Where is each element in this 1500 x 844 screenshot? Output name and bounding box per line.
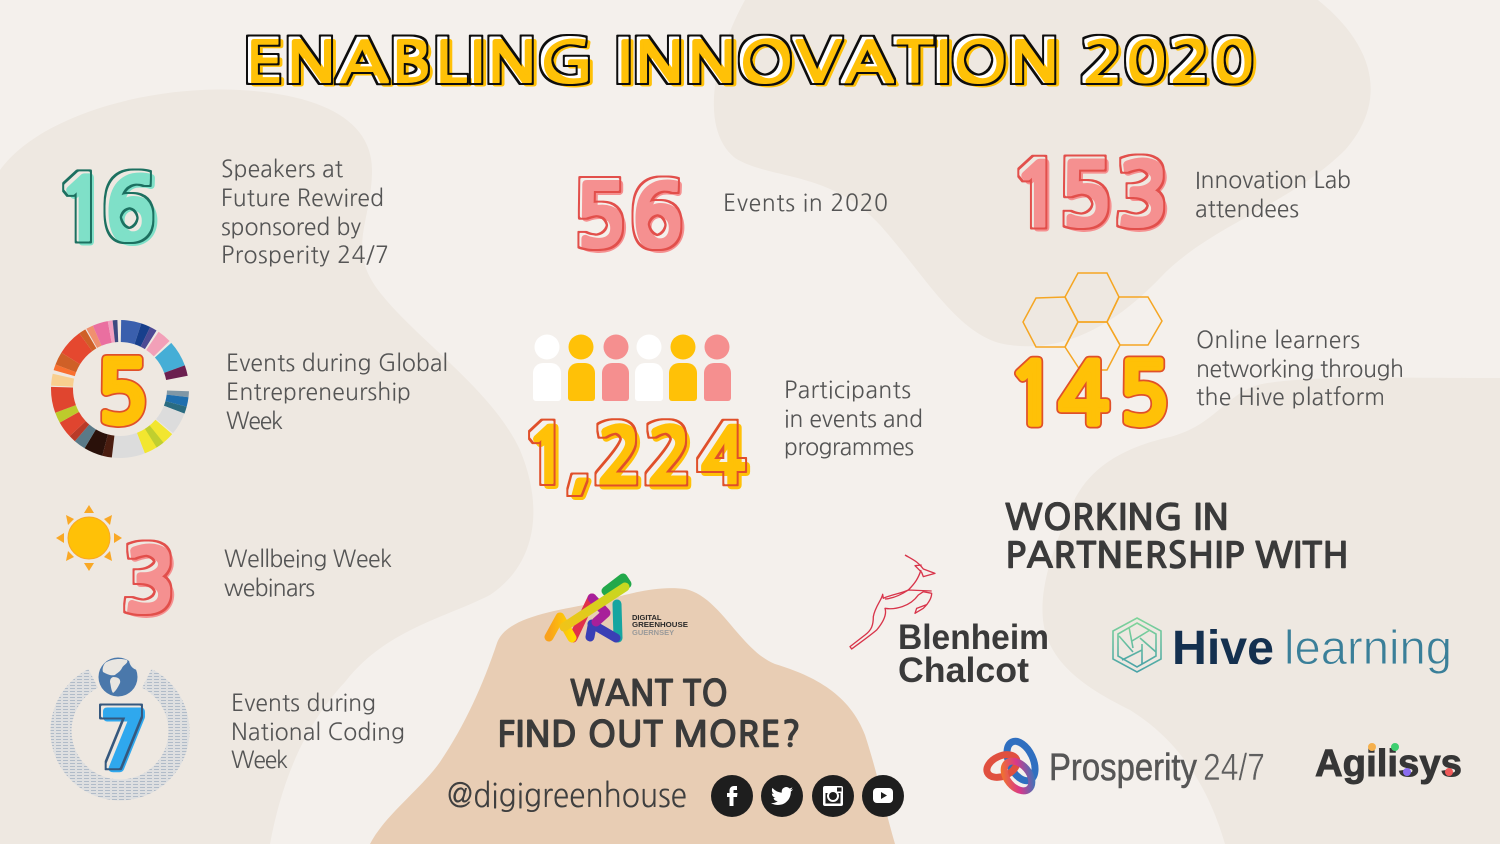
text: wellbeing week webinars: webinars	[224, 577, 315, 600]
number 5: 5	[96, 351, 148, 436]
text: national coding week: Week	[231, 749, 288, 772]
stat: 1,224 participants	[522, 334, 923, 498]
number 7: 7	[98, 702, 145, 778]
text: national coding week: National Coding	[231, 721, 405, 744]
number 145: 145	[1007, 353, 1170, 437]
title: ENABLING INNOVATION 2020	[242, 32, 1254, 91]
text: wellbeing week webinars: Wellbeing Week	[224, 548, 392, 571]
stat: 7 events	[61, 658, 405, 790]
number 56: 56	[573, 173, 683, 259]
text: participants	[784, 379, 923, 459]
text: online learners	[1196, 329, 1404, 409]
stat: 145 online learners	[1007, 273, 1404, 437]
number 56: 56	[576, 176, 686, 262]
logo text: DIGITAL	[632, 613, 662, 622]
number 153: 153	[1010, 152, 1168, 239]
logo text	[898, 618, 1049, 690]
icon: six people	[533, 334, 731, 401]
icon: colour ring	[62, 331, 178, 447]
icon: youtube	[862, 775, 904, 817]
heading: want to find out more	[497, 677, 801, 753]
stat: 3 webinars	[56, 505, 392, 628]
icon: hexagons	[1023, 273, 1162, 370]
text: innovation lab	[1195, 169, 1351, 221]
stat: 16 speakers	[55, 158, 389, 267]
logo text	[632, 613, 688, 637]
icon: instagram	[812, 775, 854, 817]
text: global entrepreneurship week: Entrepreneurship	[226, 381, 411, 404]
logo mark	[549, 578, 627, 638]
heading: want to find out more: FIND OUT MORE?	[497, 718, 801, 753]
heading: want to find out more: WANT TO	[570, 677, 728, 712]
text: online learners: Online learners	[1196, 329, 1360, 352]
stat: 5 events	[62, 331, 448, 447]
text: wellbeing week webinars	[224, 548, 392, 600]
number 153: 153	[1013, 155, 1171, 242]
text: social handle: @digigreenhouse	[447, 779, 687, 812]
text: global entrepreneurship week: Week	[226, 410, 283, 433]
number 5: 5	[96, 351, 148, 436]
logo text: 24/7	[1203, 747, 1265, 789]
title: ENABLING INNOVATION 2020	[246, 35, 1258, 94]
logo text: GUERNSEY	[632, 628, 674, 637]
logo: agilisys: Agilisys	[1315, 743, 1462, 785]
icon: twitter	[761, 775, 803, 817]
stat: 153 attendees	[1010, 152, 1351, 242]
text: participants: programmes	[784, 436, 914, 459]
stat: 56 events	[573, 173, 888, 262]
heading: working in partnership with: PARTNERSHIP WITH	[1005, 539, 1349, 574]
text: innovation lab: Innovation Lab	[1195, 169, 1351, 192]
text: events in 2020: Events in 2020	[723, 192, 888, 215]
tan call-to-action blob	[370, 588, 895, 844]
text: national coding week: Events during	[231, 692, 376, 715]
text: speakers: Speakers at	[221, 158, 344, 181]
logo text: Hive	[1172, 622, 1274, 675]
text: online learners: networking through	[1196, 358, 1404, 381]
text: participants: Participants	[784, 379, 911, 402]
icon: hive hexagon	[1113, 618, 1161, 672]
text: speakers: sponsored by	[221, 216, 361, 239]
number 16: 16	[58, 169, 159, 255]
logo text: Prosperity	[1049, 747, 1197, 789]
icon: antelope	[850, 555, 935, 649]
number 1,224: 1,224	[522, 416, 745, 494]
text: global entrepreneurship week: Events during Global	[226, 352, 448, 375]
logo: digital greenhouse	[549, 578, 688, 638]
logo: blenheim chalcot	[850, 555, 1049, 690]
icon: facebook	[711, 775, 753, 817]
title: ENABLING INNOVATION 2020	[242, 32, 1254, 91]
number 3: 3	[125, 541, 178, 628]
logo: prosperity 24/7	[983, 737, 1265, 796]
icon: globe	[98, 658, 138, 696]
number 3: 3	[122, 538, 175, 625]
number 1,224: 1,224	[526, 420, 749, 498]
heading: working in partnership with: WORKING IN	[1005, 501, 1229, 536]
text: online learners: the Hive platform	[1196, 386, 1385, 409]
logo text	[1172, 622, 1452, 675]
text: speakers	[221, 158, 389, 267]
text: participants: in events and	[784, 408, 923, 431]
icon: sun	[56, 505, 122, 571]
logo text: GREENHOUSE	[632, 620, 688, 629]
number 7: 7	[101, 705, 148, 781]
text: global entrepreneurship week	[226, 352, 448, 433]
logo: hive learning	[1113, 618, 1452, 675]
icon: text ring	[61, 678, 179, 790]
text: innovation lab: attendees	[1195, 198, 1299, 221]
heading: working in partnership with	[1005, 501, 1349, 574]
logo text: Chalcot	[898, 651, 1029, 690]
text: speakers: Future Rewired	[221, 187, 384, 210]
text: national coding week	[231, 692, 405, 772]
icon: interlocked rings	[983, 737, 1041, 796]
logo text: Blenheim	[898, 618, 1049, 657]
number 145: 145	[1007, 353, 1170, 437]
text: speakers: Prosperity 24/7	[221, 244, 389, 267]
logo text: learning	[1284, 622, 1452, 675]
number 16: 16	[55, 166, 155, 252]
social icons	[711, 775, 904, 817]
